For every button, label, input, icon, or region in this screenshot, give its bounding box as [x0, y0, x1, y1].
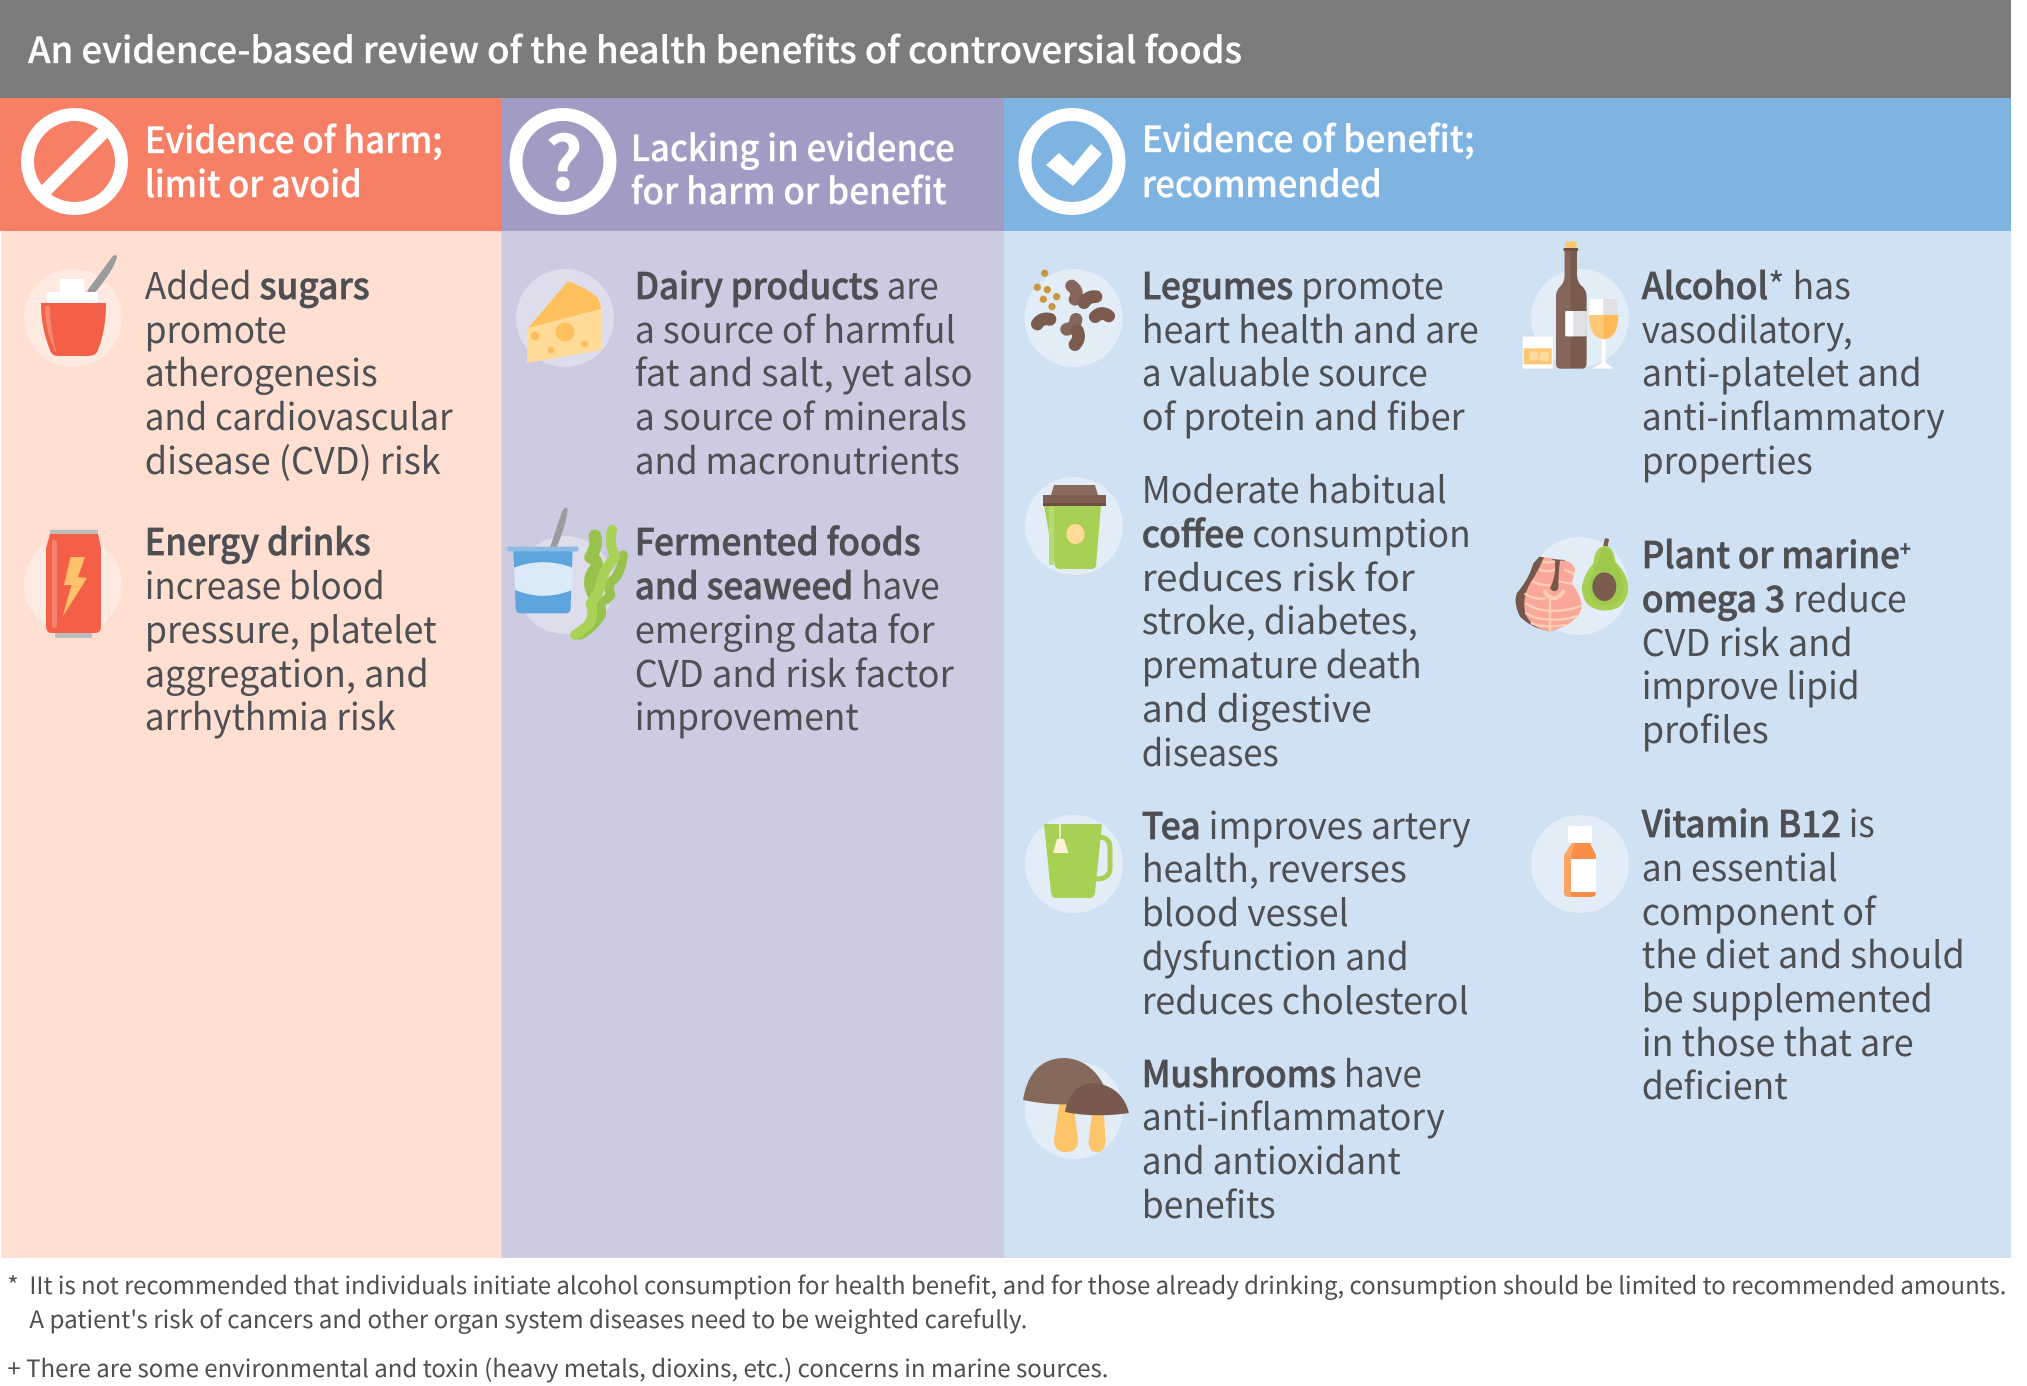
text: mushrooms: and antioxidant — [1142, 1132, 1401, 1185]
text: dairy products: and macronutrients — [635, 432, 960, 485]
text: vitamin B12 — [1641, 795, 1965, 1110]
icon: energy drink can — [24, 530, 122, 638]
text: fermented foods and seaweed: and seaweed have — [635, 557, 940, 610]
text: alcohol: vasodilatory, — [1642, 301, 1853, 354]
text: coffee: reduces risk for — [1142, 549, 1416, 602]
icon: prohibition sign — [28, 114, 122, 208]
text: added sugars: disease (CVD) risk — [145, 432, 441, 485]
icon: tea mug — [1025, 815, 1123, 913]
text: added sugars — [145, 257, 453, 485]
heading: evidence of harm: limit or avoid — [145, 156, 362, 208]
text: tea — [1142, 797, 1471, 1025]
text: coffee: premature death — [1142, 636, 1422, 689]
text: fermented foods and seaweed: emerging data for — [635, 601, 936, 654]
text: dairy products: a source of harmful — [635, 301, 956, 354]
text: added sugars: Added sugars — [145, 257, 370, 310]
text: energy drinks: pressure, platelet — [145, 601, 437, 654]
text: added sugars: promote — [145, 301, 287, 354]
text: vitamin B12: Vitamin B12 is — [1641, 795, 1875, 848]
text: dairy products — [635, 257, 973, 485]
icon: cheese wedge — [516, 269, 614, 367]
footnotes: A patient's risk of cancers and other organ system diseases need to be weighted carefully. — [29, 1300, 1027, 1335]
footnotes — [7, 1266, 2006, 1384]
text: vitamin B12: be supplemented — [1642, 970, 1933, 1023]
text: omega 3: CVD risk and — [1642, 614, 1853, 667]
text: omega 3: + — [1900, 533, 1911, 562]
heading: lacking in evidence: Lacking in evidence — [631, 120, 955, 172]
text: omega 3: improve lipid — [1642, 657, 1860, 710]
text: coffee: stroke, diabetes, — [1142, 592, 1418, 645]
text: alcohol: anti-platelet and — [1642, 344, 1922, 397]
text: mushrooms: benefits — [1142, 1176, 1276, 1229]
text: mushrooms: anti-inflammatory — [1142, 1088, 1445, 1141]
text: vitamin B12: deficient — [1642, 1057, 1788, 1110]
text: omega 3: Plant or marine — [1642, 526, 1900, 579]
text: energy drinks: increase blood — [145, 557, 385, 610]
panel: evidence of benefit — [1004, 98, 2011, 1258]
icon: coffee cup — [1025, 477, 1123, 575]
text: tea: health, reverses — [1142, 840, 1407, 893]
text: tea: reduces cholesterol — [1142, 972, 1469, 1025]
text: fermented foods and seaweed: CVD and risk factor — [635, 645, 955, 698]
icon: mushrooms — [1023, 1058, 1129, 1159]
text: energy drinks — [145, 513, 437, 741]
title bar — [0, 0, 2011, 98]
text: added sugars: atherogenesis — [145, 344, 378, 397]
text: dairy products: fat and salt, yet also — [635, 344, 973, 397]
text: fermented foods and seaweed: Fermented foods — [635, 513, 921, 566]
text: tea: Tea improves artery — [1142, 797, 1471, 850]
text: alcohol: properties — [1642, 432, 1813, 485]
text: coffee: and digestive — [1142, 680, 1372, 733]
heading: evidence of harm: Evidence of harm; — [145, 112, 443, 164]
text: alcohol: anti-inflammatory — [1642, 388, 1945, 441]
text: alcohol — [1642, 257, 1945, 485]
text: coffee: coffee consumption — [1142, 505, 1471, 558]
panel: evidence of harm — [0, 98, 502, 1258]
text: omega 3: profiles — [1642, 701, 1769, 754]
heading: evidence of harm — [145, 112, 443, 208]
text: fermented foods and seaweed: improvement — [635, 688, 859, 741]
heading: evidence of benefit — [1142, 111, 1475, 208]
heading: evidence of benefit: Evidence of benefit; — [1142, 111, 1475, 163]
text: vitamin B12: an essential — [1642, 839, 1838, 892]
icon: check mark — [1025, 114, 1119, 208]
text: legumes: a valuable source — [1142, 344, 1428, 397]
heading: lacking in evidence: for harm or benefit — [631, 163, 947, 215]
text: tea: blood vessel — [1142, 884, 1349, 937]
icon: added sugars jar — [24, 255, 122, 367]
text: energy drinks: arrhythmia risk — [145, 688, 396, 741]
icon: vitamin bottle — [1531, 815, 1629, 913]
text: energy drinks: Energy drinks — [145, 513, 371, 566]
text: legumes: of protein and fiber — [1142, 388, 1466, 441]
text: vitamin B12: the diet and should — [1642, 926, 1965, 979]
footnotes: + There are some environmental and toxin (heavy metals, dioxins, etc.) concerns in marine sources. — [7, 1349, 1108, 1384]
text: mushrooms — [1142, 1045, 1445, 1229]
text: vitamin B12: component of — [1642, 883, 1877, 936]
icon: legumes — [1025, 269, 1123, 367]
text: fermented foods and seaweed — [635, 513, 955, 741]
icon: alcohol bottle and glasses — [1523, 241, 1629, 369]
panel: lacking in evidence — [502, 98, 1004, 1258]
icon: question mark: ? — [545, 105, 583, 212]
title bar: An evidence-based review of the health benefits of controversial foods — [28, 22, 1242, 74]
text: coffee: diseases — [1142, 724, 1279, 777]
text: coffee: Moderate habitual — [1142, 461, 1447, 514]
footnotes: IIt is not recommended that individuals initiate alcohol consumption for health benefit, and for those already drinking, consumption should be limited to recommended amounts. — [29, 1266, 2006, 1301]
text: dairy products: a source of minerals — [635, 388, 967, 441]
text: alcohol: Alcohol* has — [1642, 257, 1851, 310]
icon: question mark — [516, 105, 610, 212]
footnotes: * — [7, 1266, 19, 1301]
icon: salmon and avocado — [1516, 537, 1628, 635]
text: legumes: heart health and are — [1142, 301, 1479, 354]
text: added sugars: and cardiovascular — [145, 388, 453, 441]
text: legumes: Legumes promote — [1142, 257, 1444, 310]
text: dairy products: Dairy products are — [635, 257, 939, 310]
text: omega 3 — [1642, 526, 1911, 754]
text: legumes — [1142, 257, 1479, 441]
text: vitamin B12: in those that are — [1642, 1014, 1914, 1067]
text: mushrooms: Mushrooms have — [1142, 1045, 1422, 1098]
text: energy drinks: aggregation, and — [145, 645, 429, 698]
text: tea: dysfunction and — [1142, 928, 1409, 981]
heading: lacking in evidence — [631, 120, 955, 215]
icon: yogurt and seaweed — [507, 507, 623, 635]
heading: evidence of benefit: recommended — [1142, 156, 1382, 208]
text: omega 3: omega 3 reduce — [1642, 570, 1907, 623]
text: coffee — [1142, 461, 1471, 777]
